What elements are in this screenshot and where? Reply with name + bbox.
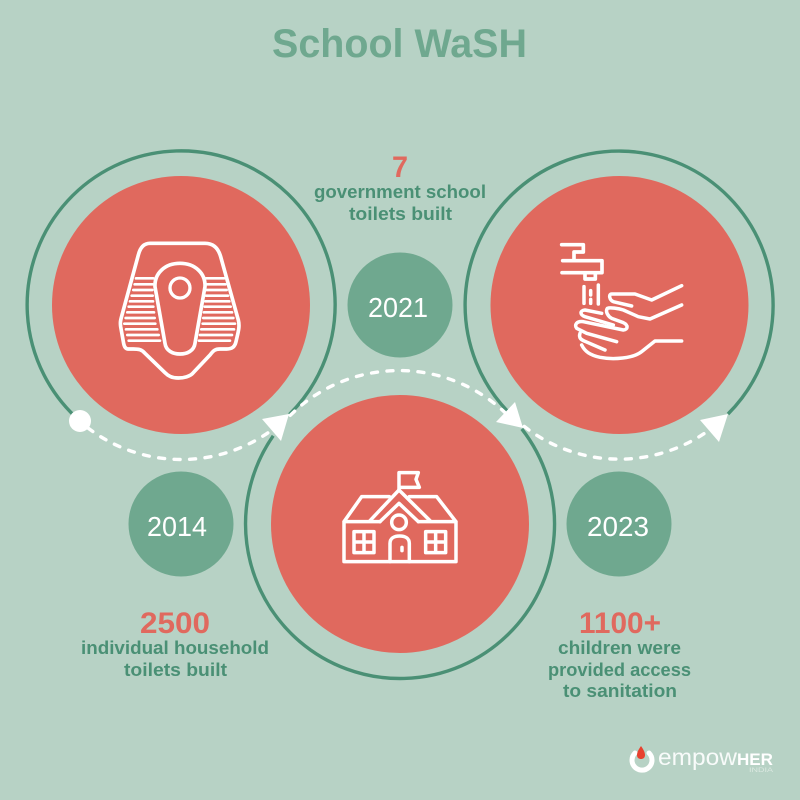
text block: 7 toilets: toilets built [349,204,452,224]
year badge: 2014 [128,472,234,576]
red circle: toilet [52,176,310,434]
logo: empowHER India: INDIA [749,768,773,774]
text block: 2500 toilets [81,607,269,680]
ring: right [465,151,773,414]
title: School WaSH [272,22,527,66]
dashed path [88,371,712,460]
year badge: 2023: 2023 [587,511,649,542]
icon: squat toilet [120,243,239,378]
text block: 1100+ children: 1100+ [579,607,661,640]
text block: 1100+ children [548,607,691,701]
arrow 1 [262,414,289,441]
arrow 3 [700,414,728,442]
red circle: handwashing [490,176,748,434]
logo: empowHER India: empow [658,744,737,770]
text block: 1100+ children: children were [558,638,681,658]
logo: empowHER India [632,744,773,774]
ring: left [27,151,335,421]
ring: middle [246,429,555,679]
text block: 2500 toilets: 2500 [140,607,210,640]
icon: school building [344,473,456,562]
year badge: 2021 [348,252,452,358]
year badge: 2023 [566,472,672,576]
red circle: school [271,395,529,653]
logo: empowHER India: HER [737,750,773,769]
text block: 7 toilets: government school [314,182,486,202]
icon: tap and washing hands [562,245,682,359]
arrow 2 [496,402,523,428]
text block: 1100+ children: provided access [548,660,691,680]
year badge: 2021: 2021 [368,292,428,323]
text block: 7 toilets: 7 [392,151,408,184]
start dot [69,410,91,432]
year badge: 2014: 2014 [147,511,207,542]
text block: 1100+ children: to sanitation [563,681,677,701]
text block: 2500 toilets: toilets built [124,660,227,680]
text block: 7 toilets [314,151,486,224]
text block: 2500 toilets: individual household [81,638,269,658]
